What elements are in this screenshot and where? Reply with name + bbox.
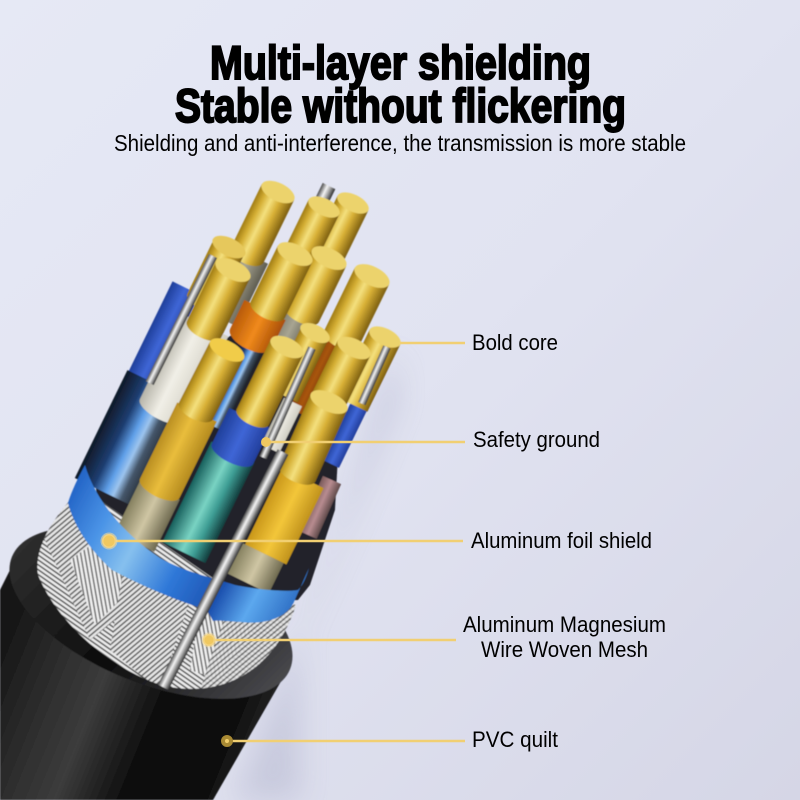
label: PVC quilt: PVC quilt: [472, 727, 558, 752]
jacket end ring: [0, 492, 316, 734]
label: Safety ground: Safety ground: [473, 427, 600, 452]
title: Multi-layer shielding: [210, 36, 591, 89]
PVC jacket: [0, 562, 283, 800]
cable core interior: [95, 330, 340, 605]
label: Bold core: Bold core: [472, 330, 558, 355]
callout line: woven mesh: [209, 639, 456, 641]
aluminum foil band: [68, 465, 309, 623]
label: Aluminum Magnesium Wire Woven Mesh: Wire Woven Mesh: [481, 637, 648, 662]
callout line: bold core: [400, 342, 465, 344]
teal conductor: [162, 331, 307, 563]
silver ground wire, left: [146, 254, 217, 385]
label: Aluminum Magnesium Wire Woven Mesh: Aluminum Magnesium: [463, 612, 666, 637]
woven mesh: [36, 502, 296, 690]
label: Aluminum foil shield: Aluminum foil shield: [471, 528, 652, 553]
cable cast shadow: [235, 350, 400, 800]
callout line: aluminum foil shield: [109, 540, 463, 542]
metallic blue insulation: [75, 370, 189, 508]
callout line: PVC quilt: [227, 740, 465, 742]
yellow insulated conductor, left: [115, 333, 248, 552]
yellow insulated conductor, right: [227, 385, 351, 594]
callout line: safety ground: [266, 441, 465, 443]
back left conductor: [183, 231, 249, 316]
callout dots: [102, 437, 271, 745]
label: Aluminum Magnesium Wire Woven Mesh: [463, 612, 666, 662]
white insulated conductor: [136, 253, 254, 431]
pink sleeve: [298, 476, 341, 539]
back conductors: [201, 176, 372, 327]
centre white wire and second ground wire: [260, 346, 316, 459]
gold conductors, middle row: [225, 237, 393, 359]
callouts: [109, 343, 465, 741]
silver ground wire, front: [158, 449, 288, 690]
cable illustration: [0, 176, 404, 800]
brown and grey sleeves: [202, 268, 351, 431]
title: [175, 36, 626, 132]
blue side insulation: [129, 281, 199, 384]
subtitle: Shielding and anti-interference, the transmission is more stable: [114, 130, 686, 156]
right cluster conductors: [270, 319, 404, 412]
blue right-side insulation: [323, 388, 374, 468]
title: Stable without flickering: [175, 79, 626, 132]
